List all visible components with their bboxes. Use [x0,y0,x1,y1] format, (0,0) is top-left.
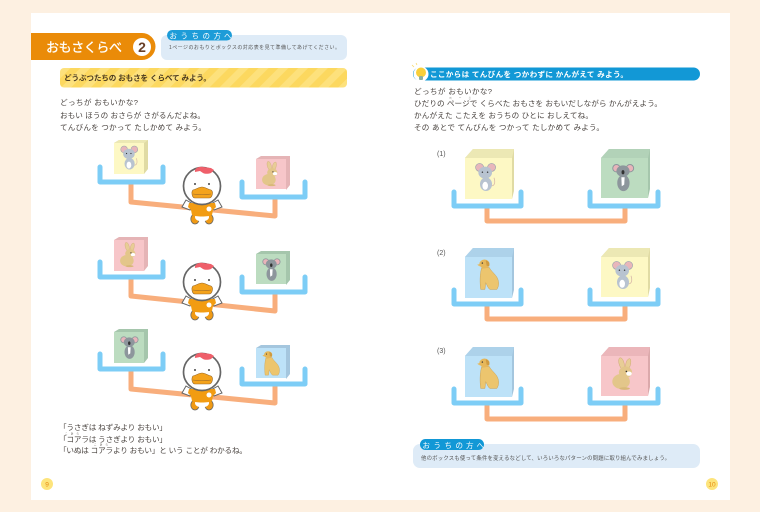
intro text (right): かんがえた こたえを おうちの ひとに おしえてね。 [414,110,593,120]
intro text (left): てんびんを つかって たしかめて みよう。 [60,123,206,132]
problem (3): dog vs rabbit [437,347,658,419]
conclusion text: 「いぬは コアラより おもい」と いう ことが わかるね。 [59,445,247,455]
conclusion text: 「うさぎは ねずみより おもい」 [59,422,167,432]
conclusion text: こあら [65,432,79,436]
intro text (right) [414,86,662,132]
note box: おうちの方へ (right): 他のボックスも使って条件を変えるなどして、いろいろなパターンの問題に取り組んでみましょう。 [421,454,670,462]
intro text (left): おもい ほうの おさらが さがるんだよね。 [60,110,205,120]
intro text (right): その あとで てんびんを つかって たしかめて みよう。 [414,123,604,132]
note box: おうちの方へ (left): おうちの方へ [170,30,232,40]
problem (2): dog vs mouse: (2) [437,250,446,257]
conclusion text: 「コアラは うさぎより おもい」 [59,434,167,444]
title: おもさくらべ 2: 2 [138,39,146,55]
page number 9 [41,478,53,490]
problem (1): mouse vs koala [437,149,658,221]
note box: おうちの方へ (left) [161,30,347,60]
balance 1: mouse vs rabbit, duck [100,140,305,224]
problem (1): mouse vs koala: (1) [437,151,446,158]
intro text (right): ぺーじ [449,96,471,100]
conclusion text: こあら [94,442,108,446]
conclusion text [59,422,247,455]
page number 9: 9 [45,482,49,488]
intro text (right): ひだりの ページで くらべた おもさを おもいだしながら かんがえよう。 [414,98,662,108]
note box: おうちの方へ (left): 1ページのおもりとボックスの対応表を見て準備してあげてください。 [169,44,340,51]
intro text (left) [60,97,206,132]
heading strip: compare weights [60,68,347,88]
problem (2): dog vs mouse [437,248,658,319]
problem (3): dog vs rabbit: (3) [437,348,446,355]
page number 10 [706,478,718,490]
heading strip: think without the balance: ここからは てんびんを つかわずに かんがえて みよう。 [430,69,628,79]
balance 2: rabbit vs koala, duck [100,237,305,320]
title: おもさくらべ 2: おもさくらべ [46,40,122,55]
intro text (left): どっちが おもいかな? [60,97,138,107]
icon: light bulb [412,63,428,82]
intro text (right): どっちが おもいかな? [414,86,492,96]
heading strip: think without the balance [413,68,700,80]
heading strip: compare weights: どうぶつたちの おもさを くらべて みよう。 [64,72,211,82]
note box: おうちの方へ (right): おうちの方へ [422,440,484,450]
note box: おうちの方へ (right) [413,439,700,468]
page number 10: 10 [708,482,716,488]
balance 3: koala vs dog, duck [100,329,305,410]
title: おもさくらべ 2 [31,33,156,60]
